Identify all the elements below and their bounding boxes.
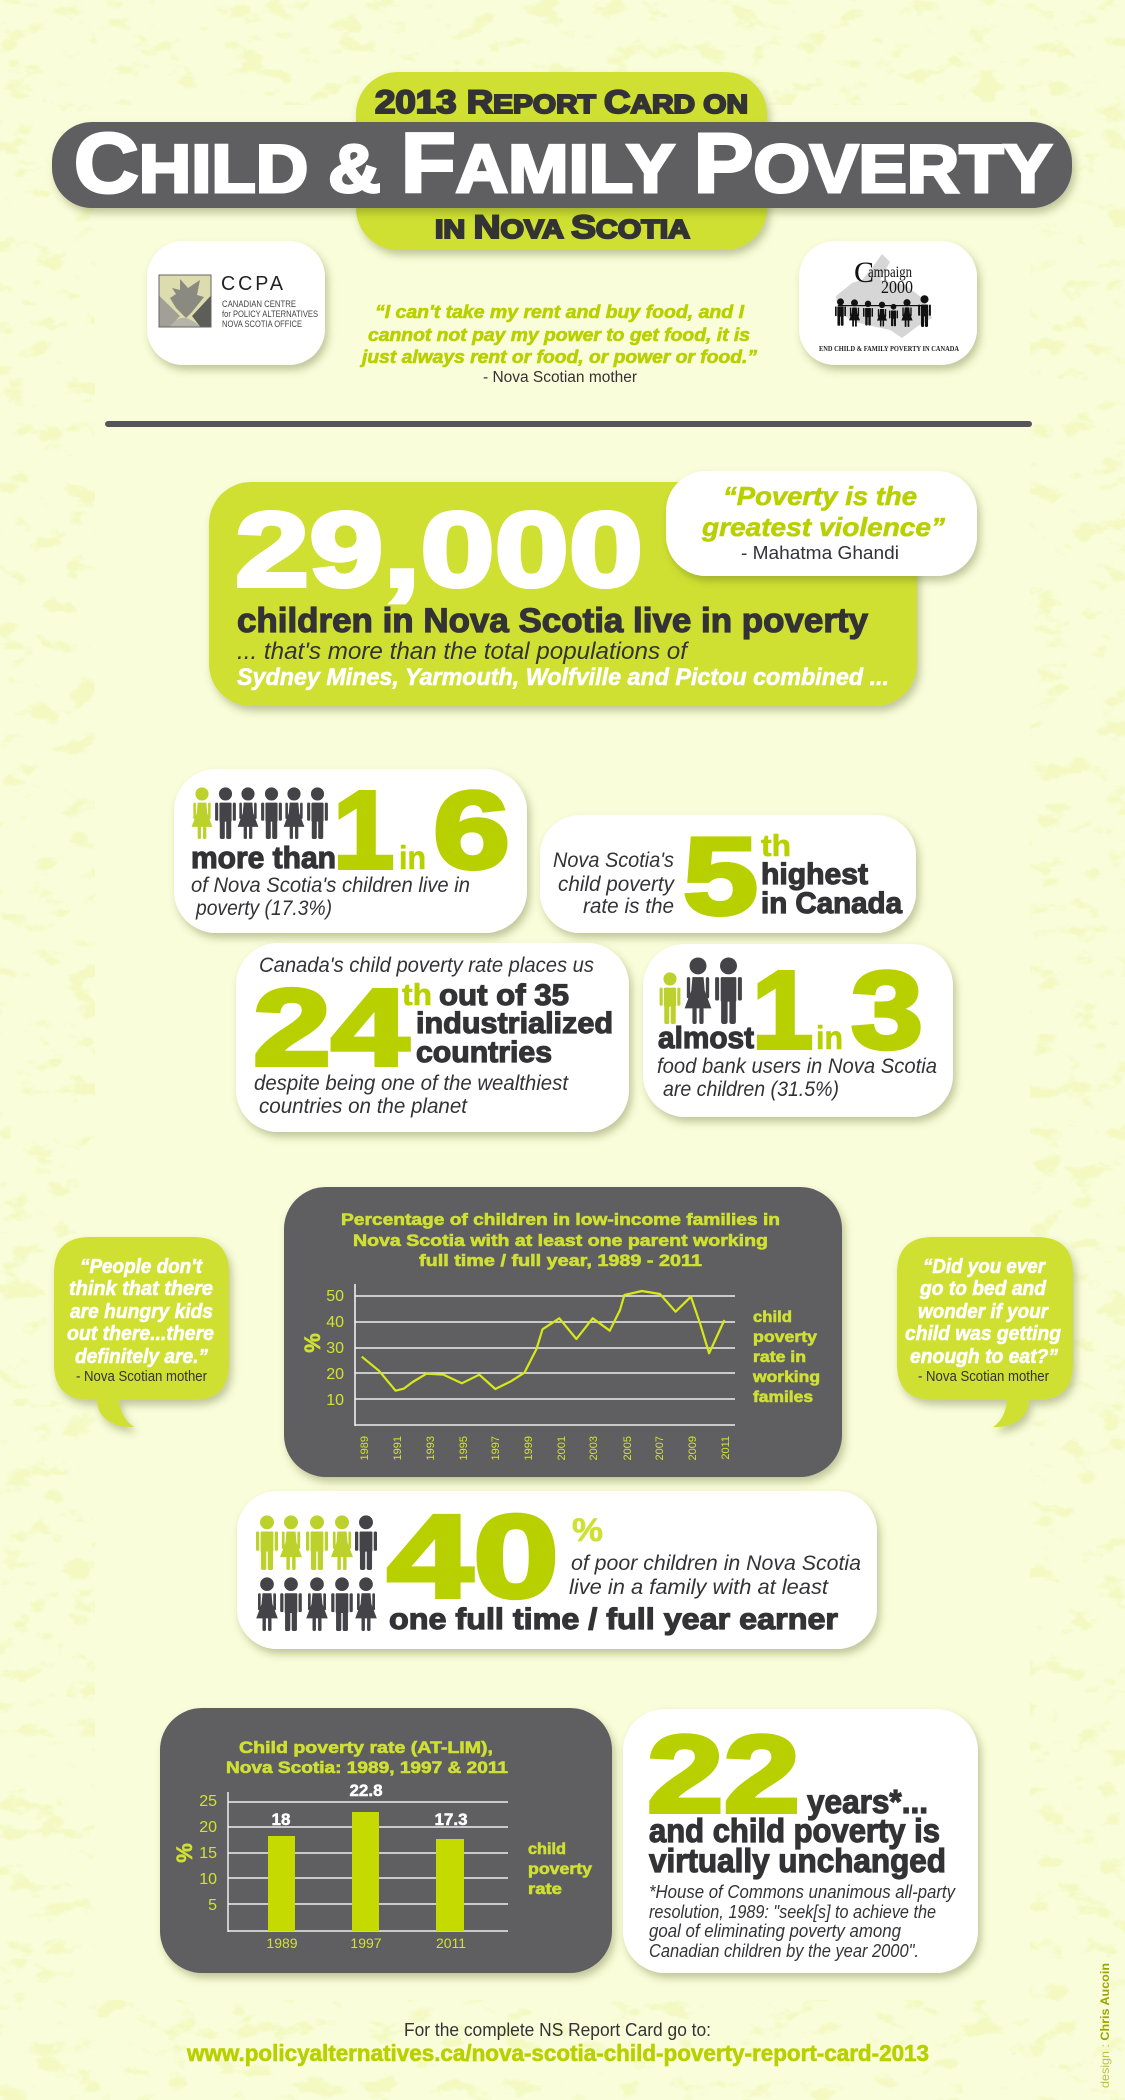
x axis years: 1993 <box>425 1436 437 1460</box>
number 1 in 3: in <box>816 1019 843 1056</box>
campaign tagline: END CHILD & FAMILY POVERTY IN CANADA <box>819 344 959 353</box>
label: almost: almost <box>658 1020 754 1055</box>
towns line: Sydney Mines, Yarmouth, Wolfville and Pictou combined ... <box>237 664 889 691</box>
quote: rent or food: cannot not pay my power to get food, it is <box>368 325 750 345</box>
icon: map of Canada <box>836 254 932 338</box>
panel: bar chart <box>160 1708 612 1973</box>
card: 1 in 3 <box>643 944 953 1117</box>
label: years: years*... <box>807 1783 928 1820</box>
lead text: Canada's child poverty rate places us <box>259 954 594 977</box>
x axis years: 2001 <box>556 1436 568 1460</box>
campaign 2000 wordmark <box>854 256 913 297</box>
chart title <box>226 1738 508 1777</box>
label: out of 35 industrialized countries: out of 35 <box>439 979 569 1012</box>
logo card: CCPA <box>147 241 325 365</box>
number 1 in 6 <box>333 769 510 892</box>
speech bubble: hungry kids: think that there <box>69 1277 213 1300</box>
y axis unit: % <box>300 1333 325 1353</box>
label: more than: more than <box>191 840 336 875</box>
heading: in nova scotia: IN NOVA SCOTIA <box>435 209 690 245</box>
series label <box>752 1309 820 1406</box>
y axis labels: 15 <box>199 1845 217 1862</box>
callout: Gandhi quote: - Mahatma Ghandi <box>741 542 899 563</box>
caption <box>254 1072 569 1118</box>
panel: line chart <box>284 1187 842 1477</box>
footer url: www.policyalternatives.ca/nova-scotia-child-poverty-report-card-2013 <box>186 2040 929 2066</box>
footnote <box>649 1882 956 1961</box>
data line <box>362 1291 724 1391</box>
footer <box>186 2020 929 2066</box>
x axis years: 1997 <box>490 1436 502 1460</box>
caption <box>657 1055 937 1101</box>
footnote: *House of Commons unanimous all-party <box>649 1882 956 1902</box>
number 22: 22 <box>647 1713 800 1836</box>
percent sign: % <box>572 1512 603 1548</box>
card: 40 percent <box>237 1491 877 1649</box>
label: highest in Canada: highest <box>761 858 868 891</box>
icon: row of people <box>835 295 931 327</box>
callout: Gandhi quote <box>666 471 977 576</box>
series label: familes <box>753 1389 813 1406</box>
speech bubble: hungry kids: “People don't <box>80 1255 203 1278</box>
x axis years: 2005 <box>622 1436 634 1460</box>
organisation name: for POLICY ALTERNATIVES <box>222 309 318 320</box>
campaign 2000 wordmark: 2000 <box>881 277 913 297</box>
ordinal th: th <box>402 977 432 1012</box>
number 1 in 6: in <box>399 839 426 876</box>
series label: working <box>752 1369 820 1386</box>
y axis labels: 40 <box>326 1314 344 1331</box>
campaign 2000 wordmark: ampaign <box>868 264 912 281</box>
y axis labels <box>326 1288 344 1409</box>
gray title bar <box>52 122 1072 208</box>
label: out of 35 industrialized countries <box>416 979 613 1069</box>
campaign 2000 wordmark: C <box>854 256 874 289</box>
icon: ten people <box>256 1515 377 1631</box>
footnote: resolution, 1989: "seek[s] to achieve the <box>649 1902 936 1922</box>
speech bubble: hungry kids: definitely are.” <box>75 1345 209 1368</box>
organisation name: NOVA SCOTIA OFFICE <box>222 319 302 330</box>
speech bubble: hungry kids <box>54 1237 229 1427</box>
number 24: 24 <box>253 967 409 1089</box>
card: 24th out of 35 <box>236 943 629 1132</box>
number 1 in 3: 3 <box>851 949 923 1072</box>
caption: poverty (17.3%) <box>195 897 332 920</box>
series label: rate in <box>753 1349 806 1366</box>
y axis labels <box>199 1793 217 1914</box>
organisation name: CANADIAN CENTRE <box>222 299 296 310</box>
bar values: 18 <box>272 1810 290 1829</box>
caption: of poor children in Nova Scotia <box>571 1552 861 1575</box>
x axis years: 2009 <box>687 1436 699 1460</box>
speech bubble: hungry kids: - Nova Scotian mother <box>76 1369 207 1385</box>
quote: rent or food: just always rent or food, or power or food.” <box>360 347 757 367</box>
speech bubble: going to bed hungry: enough to eat?” <box>910 1345 1059 1368</box>
footnote: goal of eliminating poverty among <box>649 1921 901 1941</box>
statement: virtually unchanged <box>649 1842 946 1879</box>
card: 1 in 6 <box>174 769 527 933</box>
lime title pill <box>356 72 767 250</box>
x axis years: 1991 <box>392 1436 404 1460</box>
series label: child <box>753 1309 792 1326</box>
card: 5th highest <box>540 815 916 938</box>
statement: children in Nova Scotia live in poverty <box>237 602 868 640</box>
CCPA wordmark: CCPA <box>221 273 286 295</box>
caption: of Nova Scotia's children live in <box>191 874 470 897</box>
x axis years <box>359 1436 732 1460</box>
series label: poverty <box>528 1861 592 1878</box>
y axis labels: 20 <box>326 1366 344 1383</box>
speech bubble: going to bed hungry <box>897 1237 1073 1427</box>
chart grid and axes <box>228 1792 508 1932</box>
chart grid and axes <box>355 1284 735 1426</box>
series label: child <box>528 1841 566 1858</box>
statement: and child poverty is <box>649 1812 940 1849</box>
chart title: full time / full year, 1989 - 2011 <box>419 1251 702 1270</box>
y axis unit: % <box>172 1843 197 1863</box>
chart title: Percentage of children in low-income families in <box>341 1210 780 1229</box>
speech bubble: going to bed hungry: - Nova Scotian mother <box>918 1369 1049 1385</box>
label: highest in Canada: in Canada <box>761 887 902 920</box>
caption: rate is the <box>583 895 674 918</box>
x axis years: 1999 <box>523 1436 535 1460</box>
footer lead: For the complete NS Report Card go to: <box>404 2020 711 2040</box>
speech bubble: going to bed hungry: “Did you ever <box>923 1255 1046 1278</box>
series label: rate <box>528 1881 562 1898</box>
designer credit: design : Chris Aucoin <box>1098 1963 1112 2088</box>
x axis years <box>266 1935 466 1951</box>
x axis years: 2007 <box>654 1436 666 1460</box>
number 1 in 6: 6 <box>433 769 510 892</box>
chart title: Nova Scotia: 1989, 1997 & 2011 <box>226 1758 508 1777</box>
x axis years: 1995 <box>458 1436 470 1460</box>
x axis years: 1997 <box>350 1935 382 1951</box>
bar values: 17.3 <box>434 1810 468 1829</box>
y axis labels: 10 <box>199 1871 217 1888</box>
divider rule <box>105 421 1032 427</box>
x axis years: 2011 <box>436 1935 466 1951</box>
callout: Gandhi quote: greatest violence” <box>701 512 945 542</box>
chart title: Child poverty rate (AT-LIM), <box>239 1738 493 1757</box>
label: out of 35 industrialized countries: countries <box>416 1036 552 1069</box>
y axis labels: 5 <box>208 1897 217 1914</box>
caption <box>191 874 470 920</box>
x axis years: 2011 <box>720 1436 732 1460</box>
y axis labels: 50 <box>326 1288 344 1305</box>
footnote: Canadian children by the year 2000". <box>649 1941 919 1961</box>
icon: maple leaf logo <box>159 275 211 327</box>
icon: six people <box>192 787 328 839</box>
speech bubble: going to bed hungry: go to bed and <box>919 1277 1046 1300</box>
x axis years: 2003 <box>588 1436 600 1460</box>
number 1 in 3: 1 <box>752 949 813 1072</box>
caption: food bank users in Nova Scotia <box>657 1055 937 1078</box>
y axis labels: 30 <box>326 1340 344 1357</box>
chart title: Nova Scotia with at least one parent working <box>353 1231 768 1250</box>
caption <box>569 1552 861 1599</box>
label: highest in Canada <box>761 858 902 920</box>
caption: child poverty <box>558 873 675 896</box>
quote: rent or food <box>360 302 757 386</box>
card: 22 years <box>623 1709 978 1973</box>
x axis years: 1989 <box>266 1935 298 1951</box>
organisation name <box>222 299 318 330</box>
bars <box>268 1812 464 1931</box>
caption: countries on the planet <box>259 1095 468 1118</box>
icon: family of three <box>660 957 742 1024</box>
heading: 2013 report card on: 2013 R EPORT CARD ON <box>375 84 748 120</box>
label: one full time earner: one full time / full year earner <box>389 1603 838 1636</box>
number 1 in 3 <box>752 949 923 1072</box>
y axis labels: 10 <box>326 1392 344 1409</box>
y axis labels: 20 <box>199 1819 217 1836</box>
number 40: 40 <box>387 1491 559 1623</box>
chart title <box>341 1210 780 1270</box>
number 5: 5 <box>683 815 758 938</box>
speech bubble: going to bed hungry: wonder if your <box>918 1300 1049 1323</box>
panel: 29,000 children <box>209 482 917 706</box>
ordinal th: th <box>761 828 791 863</box>
bar values <box>272 1781 468 1829</box>
caption <box>553 849 675 918</box>
speech bubble: hungry kids: out there...there <box>67 1322 214 1345</box>
title: child and family poverty: CHILD & FAMILY POVERTY <box>74 116 1052 210</box>
number 1 in 6: 1 <box>333 769 394 892</box>
comparison line: ... that's more than the total populations of <box>237 638 689 665</box>
caption: are children (31.5%) <box>663 1078 839 1101</box>
quote: rent or food: “I can't take my rent and buy food, and I <box>375 302 745 322</box>
bar values: 22.8 <box>349 1781 383 1800</box>
quote: rent or food: - Nova Scotian mother <box>483 369 637 386</box>
speech bubble: hungry kids: are hungry kids <box>70 1300 213 1323</box>
logo card: Campaign 2000 <box>799 241 977 365</box>
callout: Gandhi quote: “Poverty is the <box>723 481 917 511</box>
series label <box>528 1841 592 1898</box>
caption: Nova Scotia's <box>553 849 674 872</box>
label: out of 35 industrialized countries: industrialized <box>416 1007 613 1040</box>
caption: live in a family with at least <box>569 1576 829 1599</box>
y axis labels: 25 <box>199 1793 217 1810</box>
statement <box>649 1812 946 1879</box>
series label: poverty <box>753 1329 817 1346</box>
x axis years: 1989 <box>359 1436 371 1460</box>
big number: 29,000 <box>235 491 643 609</box>
header banner <box>52 72 1072 250</box>
speech bubble: going to bed hungry: child was getting <box>905 1322 1061 1345</box>
caption: despite being one of the wealthiest <box>254 1072 569 1095</box>
